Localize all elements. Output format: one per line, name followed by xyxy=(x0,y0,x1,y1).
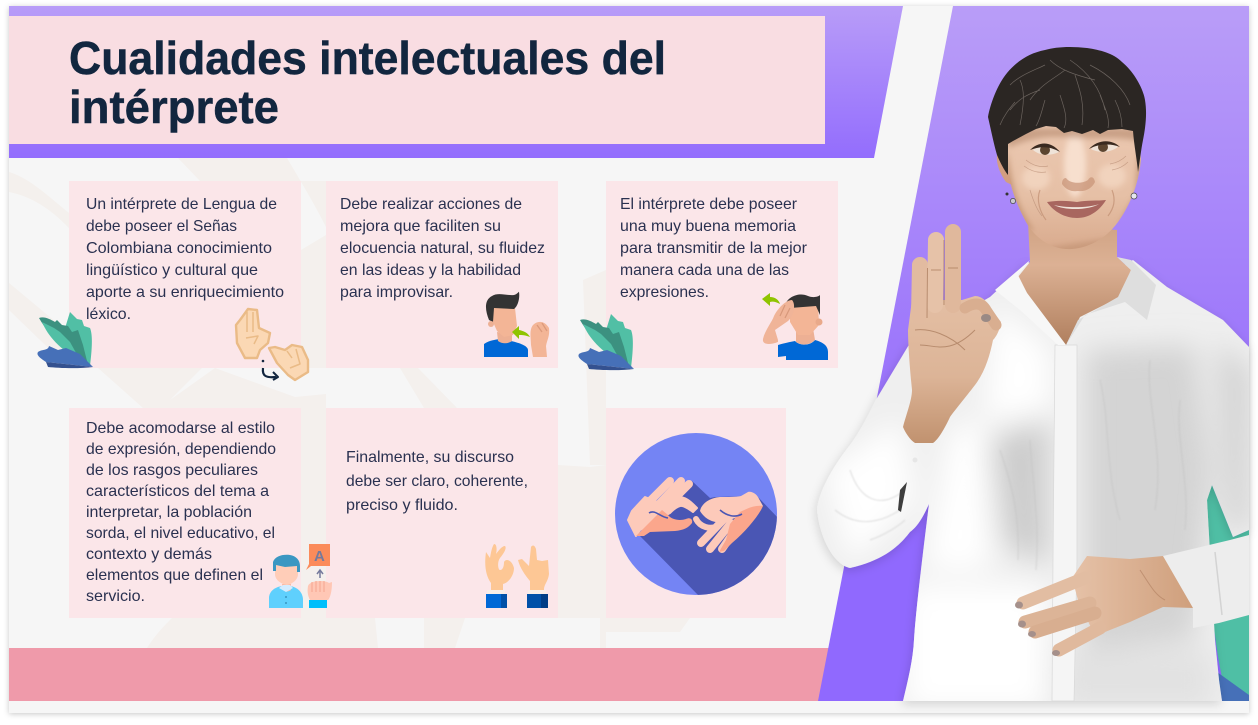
card 3: memoria: El intérprete debe poseer xyxy=(620,196,798,213)
card 4: estilo de expresión: característicos del tema a xyxy=(86,483,269,500)
card 4: estilo de expresión xyxy=(69,408,301,618)
eyes xyxy=(1033,146,1059,155)
title xyxy=(9,16,825,144)
icon: hand signs with arrow xyxy=(236,309,308,380)
lower hand xyxy=(1015,556,1193,656)
card 5: discurso: Finalmente, su discurso xyxy=(346,449,514,466)
icon: hands and sleeves xyxy=(485,544,549,608)
cuff detail xyxy=(912,458,918,462)
card 5: discurso xyxy=(326,408,558,618)
card 4: estilo de expresión: de los rasgos peculiares xyxy=(86,462,258,479)
shirt shading xyxy=(825,305,1249,710)
ears and earrings xyxy=(997,154,1012,185)
card 1: conocimiento lingüístico: lingüístico y cultural que xyxy=(86,262,258,279)
nose xyxy=(1062,177,1095,191)
icon: person with letter sign xyxy=(269,544,332,608)
card 4: estilo de expresión: Debe acomodarse al estilo xyxy=(86,420,275,437)
card 3: memoria xyxy=(606,181,838,368)
card 3: memoria: manera cada una de las xyxy=(620,262,789,279)
card 5: discurso: debe ser claro, coherente, xyxy=(346,473,528,490)
card 6: hands circle xyxy=(606,408,786,618)
card 3: memoria: una muy buena memoria xyxy=(620,218,796,235)
raised hand xyxy=(903,232,1001,443)
card 2: elocuencia: Debe realizar acciones de xyxy=(340,196,522,213)
icon: person with letter sign: A xyxy=(314,548,325,565)
top purple band xyxy=(9,6,903,158)
card 3: memoria: expresiones. xyxy=(620,284,709,301)
card 4: estilo de expresión: elementos que definen el xyxy=(86,567,263,584)
plant behind presenter xyxy=(1205,485,1249,701)
icon: man signing at chin xyxy=(484,292,549,357)
card 2: elocuencia: para improvisar. xyxy=(340,284,453,301)
card 1: conocimiento lingüístico xyxy=(69,181,301,368)
right purple panel xyxy=(818,6,1249,701)
card 4: estilo de expresión: sorda, el nivel educativo, el xyxy=(86,525,275,542)
mouth xyxy=(1047,200,1106,218)
card 1: conocimiento lingüístico: aporte a su enriquecimiento xyxy=(86,284,284,301)
card 4: estilo de expresión: contexto y demás xyxy=(86,546,212,563)
neck xyxy=(1018,222,1131,345)
card 2: elocuencia xyxy=(326,181,558,368)
card 5: discurso: preciso y fluido. xyxy=(346,497,458,514)
title: Cualidades intelectuales del xyxy=(69,32,666,84)
icon: plant left xyxy=(37,312,93,368)
title: intérprete xyxy=(69,81,279,133)
card 1: conocimiento lingüístico: léxico. xyxy=(86,306,131,323)
card 2: elocuencia: elocuencia natural, su fluidez xyxy=(340,240,545,257)
hair xyxy=(988,47,1146,175)
card 1: conocimiento lingüístico: Un intérprete de Lengua de xyxy=(86,196,277,213)
right cuff xyxy=(1163,535,1249,628)
shirt xyxy=(817,260,1249,701)
card 3: memoria: para transmitir de la mejor xyxy=(620,240,808,257)
face xyxy=(1006,115,1141,249)
placket xyxy=(1052,345,1077,701)
collar xyxy=(995,260,1066,345)
card 4: estilo de expresión: servicio. xyxy=(86,588,145,605)
presenter photo illustration xyxy=(817,47,1249,710)
bottom pink bar xyxy=(9,648,834,701)
card 1: conocimiento lingüístico: Colombiana conocimiento xyxy=(86,240,272,257)
card 2: elocuencia: en las ideas y la habilidad xyxy=(340,262,521,279)
background: faint hand pattern xyxy=(9,158,690,648)
card 1: conocimiento lingüístico: debe poseer el Señas xyxy=(86,218,237,235)
card 4: estilo de expresión: interpretar, la población xyxy=(86,504,252,521)
icon: man signing at forehead xyxy=(762,293,828,360)
card 4: estilo de expresión: de expresión, dependiendo xyxy=(86,441,276,458)
icon: plant center xyxy=(578,314,634,370)
card 2: elocuencia: mejora que faciliten su xyxy=(340,218,501,235)
